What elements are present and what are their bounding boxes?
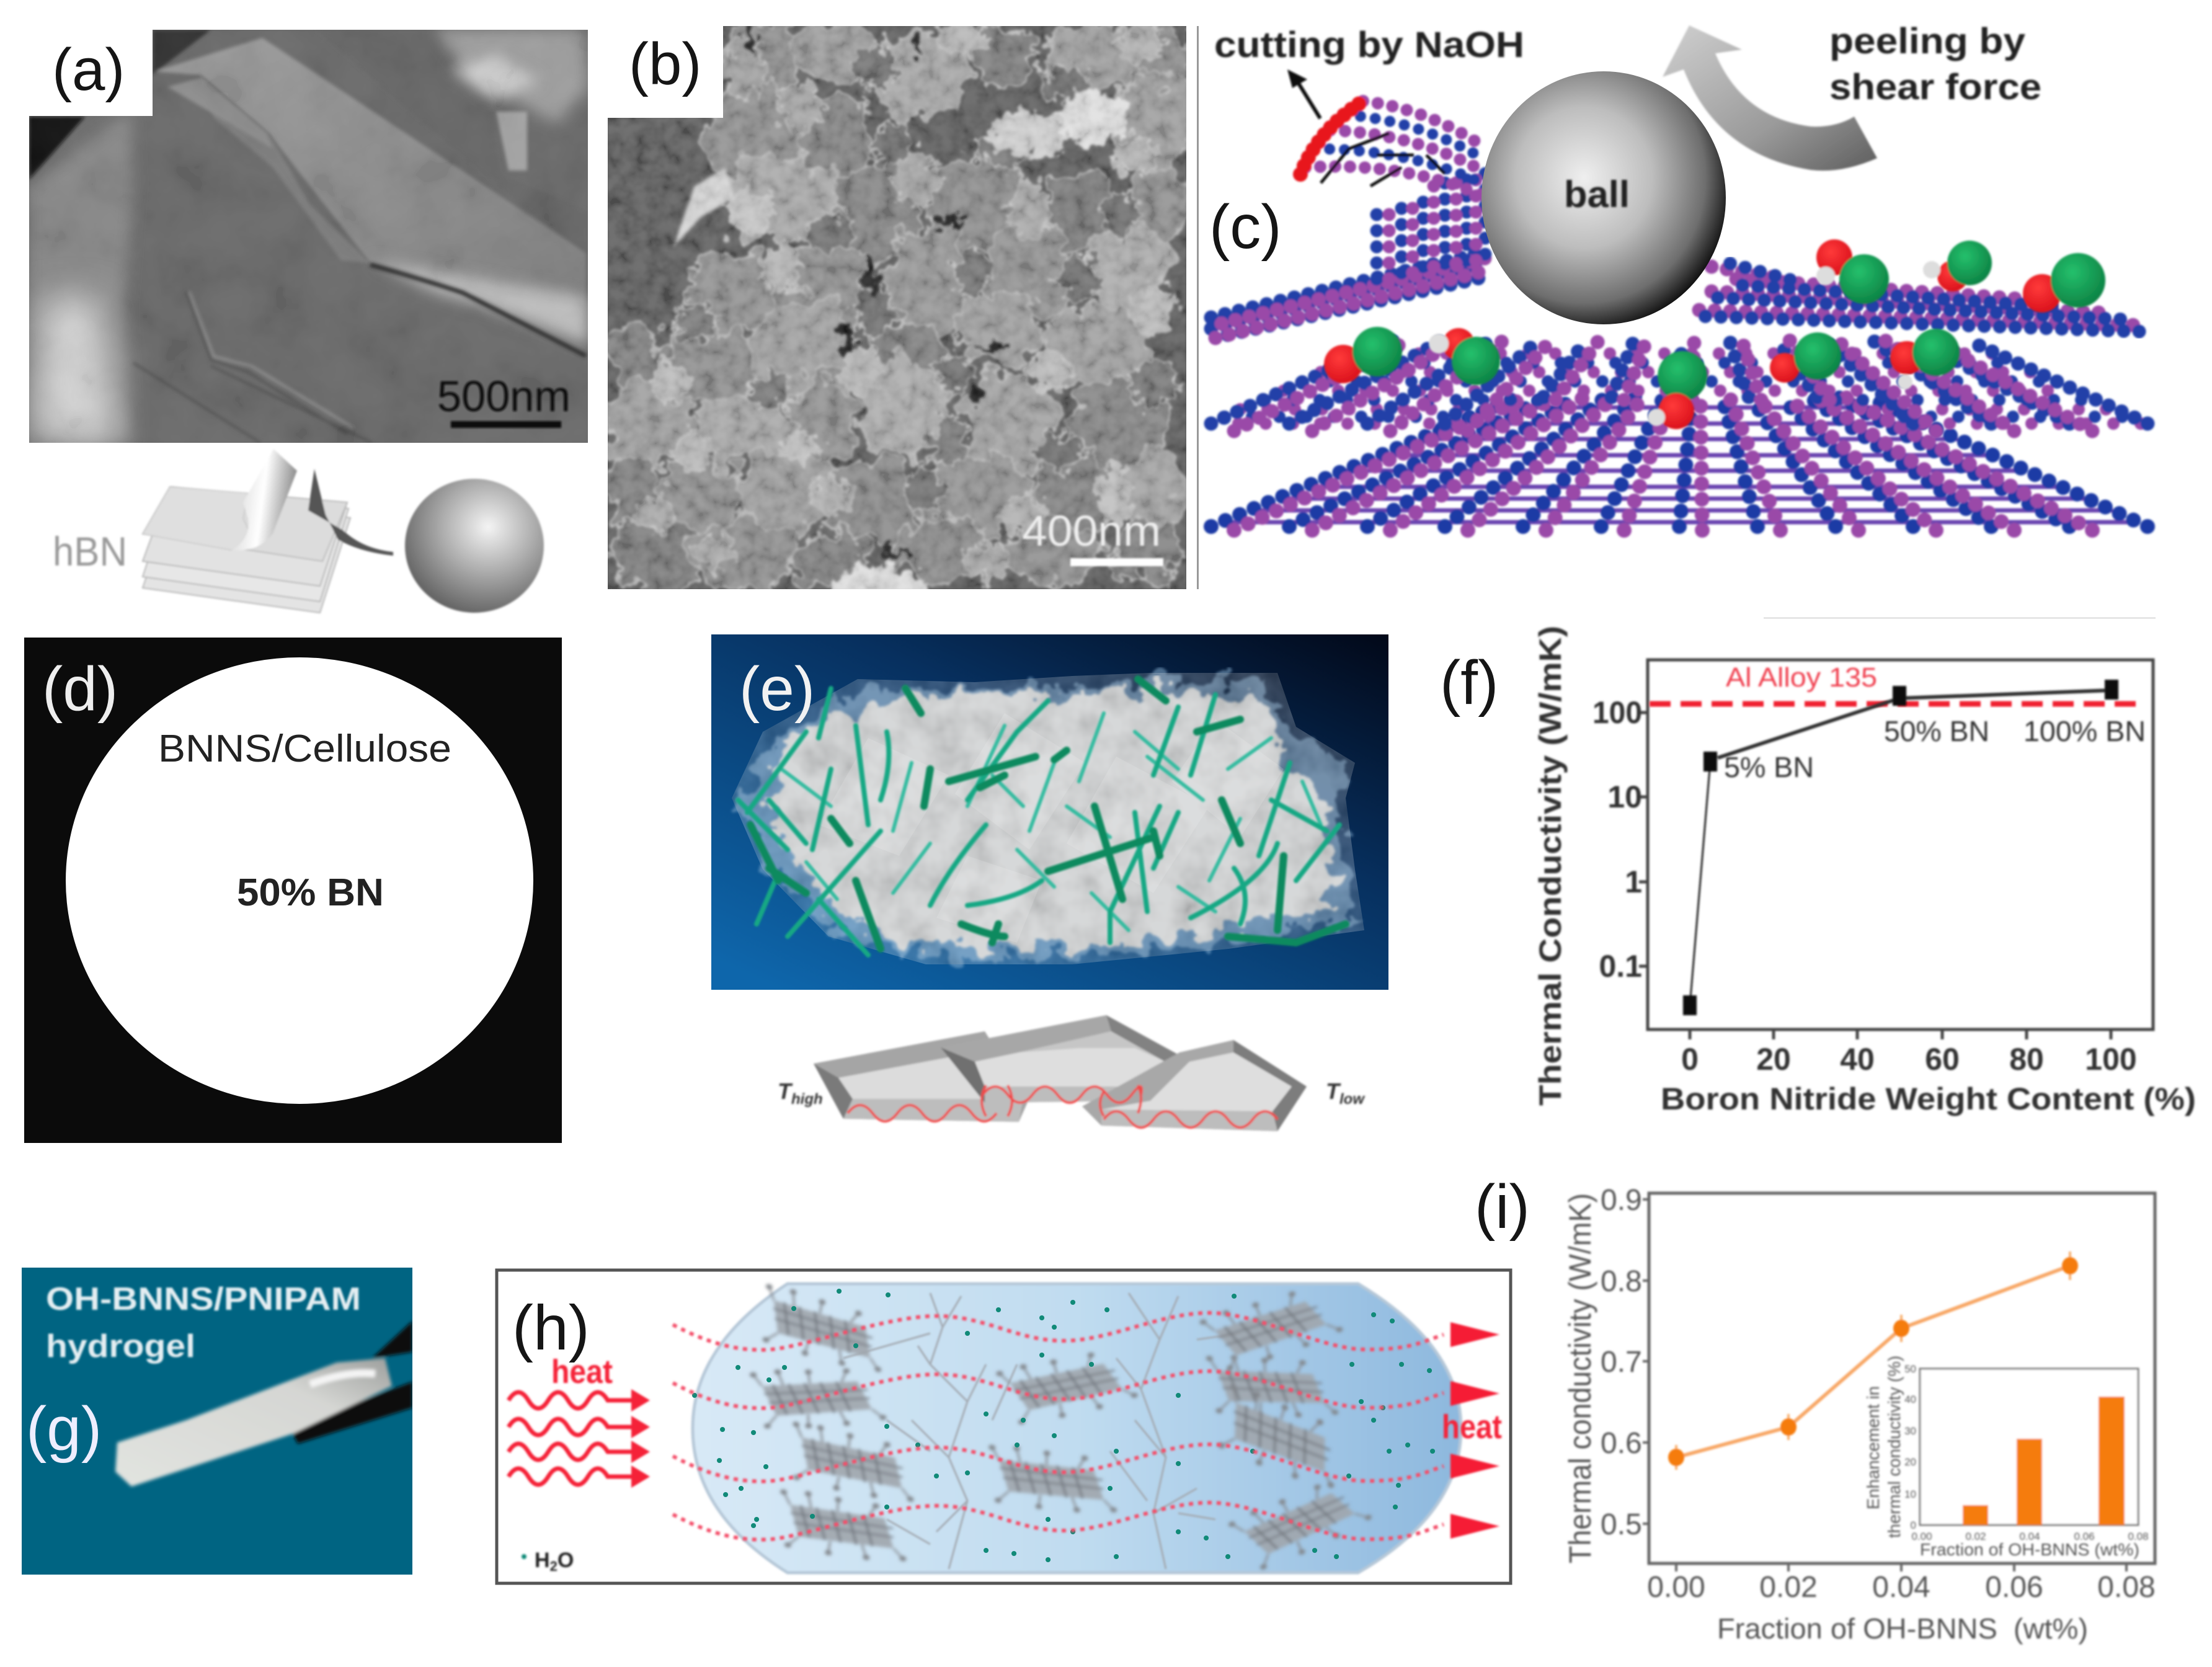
data series with error bars bbox=[1668, 1251, 2078, 1470]
text: peeling by shear force: shear force bbox=[1829, 67, 2041, 107]
axis tick labels: 0.8 bbox=[1601, 1265, 1642, 1298]
inset axis titles: thermal conductivity (%) bbox=[1885, 1356, 1904, 1538]
steel ball bbox=[1481, 71, 1726, 324]
inset ticks labels: 0.08 bbox=[2128, 1531, 2149, 1542]
label (b): (b) bbox=[629, 31, 701, 97]
axis titles bbox=[1533, 626, 2196, 1116]
axis titles: Boron Nitride Weight Content (%) bbox=[1661, 1082, 2196, 1116]
data series bbox=[1683, 680, 2118, 1015]
axis tick labels: 0.00 bbox=[1647, 1571, 1705, 1604]
labels T high and T low: high bbox=[791, 1091, 823, 1108]
panel g: hydrogel photo bbox=[22, 1268, 412, 1575]
hydrogel body bbox=[693, 1284, 1461, 1573]
inset ticks labels: 10 bbox=[1904, 1488, 1916, 1500]
label (e): (e) bbox=[739, 654, 815, 724]
axis tick labels: 100 bbox=[1592, 695, 1642, 730]
axis tick labels: 0.5 bbox=[1601, 1508, 1642, 1541]
axis tick labels: 0.06 bbox=[1985, 1571, 2043, 1604]
label (g): (g) bbox=[26, 1394, 102, 1464]
axis titles: Thermal Conductivity (W/mK) bbox=[1533, 626, 1568, 1106]
data labels: 5% BN bbox=[1724, 751, 1814, 783]
inset bars bbox=[1963, 1397, 2125, 1525]
upper left curled sheet bbox=[1211, 101, 1488, 338]
polymer chains bbox=[843, 1293, 1240, 1569]
panel b: SEM image of exfoliated flakes bbox=[602, 12, 1197, 606]
text: OH-BNNS/PNIPAM hydrogel bbox=[46, 1281, 361, 1364]
inset axis titles: Enhancement in bbox=[1863, 1386, 1883, 1509]
text: heat in: heat bbox=[551, 1353, 613, 1390]
scale bar 500nm: 500nm bbox=[437, 372, 571, 420]
labels T high and T low: low bbox=[1339, 1091, 1365, 1108]
text: heat out: heat bbox=[1442, 1408, 1502, 1446]
gray curved arrow bbox=[1663, 25, 1877, 171]
axis tick labels: 0 bbox=[1681, 1042, 1699, 1077]
inset ticks labels bbox=[1904, 1363, 2149, 1542]
SEM micrograph b bbox=[608, 12, 1197, 606]
H2O legend bbox=[522, 1549, 574, 1574]
inset ticks labels: 30 bbox=[1904, 1425, 1916, 1437]
inset ticks labels: 20 bbox=[1904, 1456, 1916, 1468]
panel e: nanosheet network render bbox=[711, 634, 1388, 1131]
label (h): (h) bbox=[512, 1292, 590, 1363]
hydrogel strip and tweezers bbox=[115, 1321, 412, 1487]
inset axis titles bbox=[1863, 1356, 2139, 1559]
scale bar 400nm: 400nm bbox=[1022, 507, 1161, 555]
hBN peeling sketch: hBN bbox=[53, 528, 127, 574]
panel h: heat transfer schematic bbox=[497, 1270, 1511, 1583]
axis titles: Thermal conductivity (W/mK) bbox=[1563, 1193, 1597, 1563]
panel c: ball milling schematic bbox=[1209, 21, 2148, 530]
inset ticks labels: 0.00 bbox=[1911, 1531, 1932, 1542]
inset ticks labels: 0 bbox=[1911, 1519, 1916, 1531]
H2O legend: H bbox=[535, 1549, 550, 1572]
label (d): (d) bbox=[42, 654, 118, 724]
axis tick labels: 20 bbox=[1756, 1042, 1791, 1077]
data labels: 100% BN bbox=[2023, 715, 2146, 747]
label (b) bbox=[602, 19, 723, 118]
panel d: BNNS cellulose film photo bbox=[24, 638, 562, 1143]
inset axis titles: Fraction of OH-BNNS (wt%) bbox=[1920, 1540, 2139, 1559]
H2O legend: 2 bbox=[550, 1558, 557, 1574]
axis tick labels: 1 bbox=[1625, 865, 1642, 899]
axis tick labels: 0.6 bbox=[1601, 1427, 1642, 1460]
axis tick labels: 60 bbox=[1925, 1042, 1960, 1077]
inset ticks labels: 0.04 bbox=[2019, 1531, 2040, 1542]
bottom BN sheet bbox=[1211, 397, 2148, 530]
text: BNNS/Cellulose: BNNS/Cellulose bbox=[158, 727, 451, 770]
inset ticks labels: 50 bbox=[1904, 1363, 1916, 1375]
text: peeling by shear force bbox=[1829, 21, 2041, 107]
BN nanosheets bbox=[750, 1279, 1373, 1573]
labels T high and T low: T bbox=[778, 1078, 791, 1104]
hBN peeling sketch bbox=[53, 449, 544, 613]
text: 50% BN: 50% BN bbox=[237, 871, 384, 914]
label (i): (i) bbox=[1475, 1172, 1530, 1242]
axis tick labels: 0.7 bbox=[1601, 1346, 1642, 1379]
water molecule dots bbox=[695, 1291, 1432, 1560]
axis tick labels: 0.04 bbox=[1872, 1571, 1930, 1604]
label (f): (f) bbox=[1440, 648, 1498, 718]
axis tick labels: 80 bbox=[2009, 1042, 2044, 1077]
label (c): (c) bbox=[1209, 192, 1282, 262]
middle BN sheet bbox=[1211, 340, 2148, 431]
text: peeling by shear force: peeling by bbox=[1829, 21, 2025, 61]
incoming heat wavy arrows bbox=[509, 1389, 650, 1488]
data labels: 50% BN bbox=[1884, 715, 1989, 747]
axis tick labels bbox=[1601, 1184, 2156, 1604]
panel i: thermal conductivity vs OH-BNNS chart bbox=[1475, 1172, 2156, 1645]
axis tick labels: 0.1 bbox=[1599, 949, 1642, 984]
label (a) bbox=[0, 0, 153, 116]
outgoing heat arrowheads bbox=[1450, 1322, 1499, 1539]
labels T high and T low: T bbox=[1326, 1078, 1339, 1104]
axis titles: Fraction of OH-BNNS (wt%) bbox=[1717, 1612, 2088, 1645]
render of sheets and fibers bbox=[711, 634, 1388, 990]
dashed heat paths bbox=[673, 1313, 1444, 1540]
inset ticks labels: 0.06 bbox=[2074, 1531, 2095, 1542]
text: OH-BNNS/PNIPAM hydrogel: OH-BNNS/PNIPAM bbox=[46, 1281, 361, 1317]
plot frame and ticks bbox=[1639, 660, 2153, 1039]
inset ticks labels: 0.02 bbox=[1965, 1531, 1986, 1542]
phonon transport tray sketch bbox=[778, 1015, 1365, 1131]
panel a: SEM image with hBN sketch bbox=[0, 0, 588, 613]
inset ticks labels: 40 bbox=[1904, 1394, 1916, 1405]
data labels bbox=[1724, 715, 2146, 783]
label (a): (a) bbox=[52, 37, 125, 103]
steel ball: ball bbox=[1564, 174, 1630, 215]
axis tick labels: 0.08 bbox=[2097, 1571, 2156, 1604]
plot frame and ticks bbox=[1643, 1193, 2155, 1571]
NaOH molecules bbox=[1324, 239, 2105, 429]
H2O legend: O bbox=[557, 1549, 574, 1572]
axis tick labels: 40 bbox=[1840, 1042, 1875, 1077]
reference line Al Alloy 135: Al Alloy 135 bbox=[1726, 662, 1877, 693]
text: OH-BNNS/PNIPAM hydrogel: hydrogel bbox=[46, 1328, 195, 1364]
axis titles bbox=[1563, 1193, 2088, 1645]
SEM micrograph a bbox=[29, 30, 588, 443]
black arrow bbox=[1287, 69, 1320, 118]
axis tick labels: 100 bbox=[2085, 1042, 2137, 1077]
inset bar chart bbox=[1863, 1356, 2149, 1559]
axis tick labels: 0.9 bbox=[1601, 1184, 1642, 1217]
axis tick labels: 10 bbox=[1607, 780, 1642, 814]
labels T high and T low bbox=[778, 1078, 1365, 1108]
text: cutting by NaOH: cutting by NaOH bbox=[1214, 25, 1524, 65]
upper right sheet bbox=[1699, 264, 2148, 332]
axis tick labels bbox=[1592, 695, 2137, 1077]
axis tick labels: 0.02 bbox=[1759, 1571, 1818, 1604]
panel f: thermal conductivity vs BN content chart bbox=[1440, 626, 2196, 1116]
